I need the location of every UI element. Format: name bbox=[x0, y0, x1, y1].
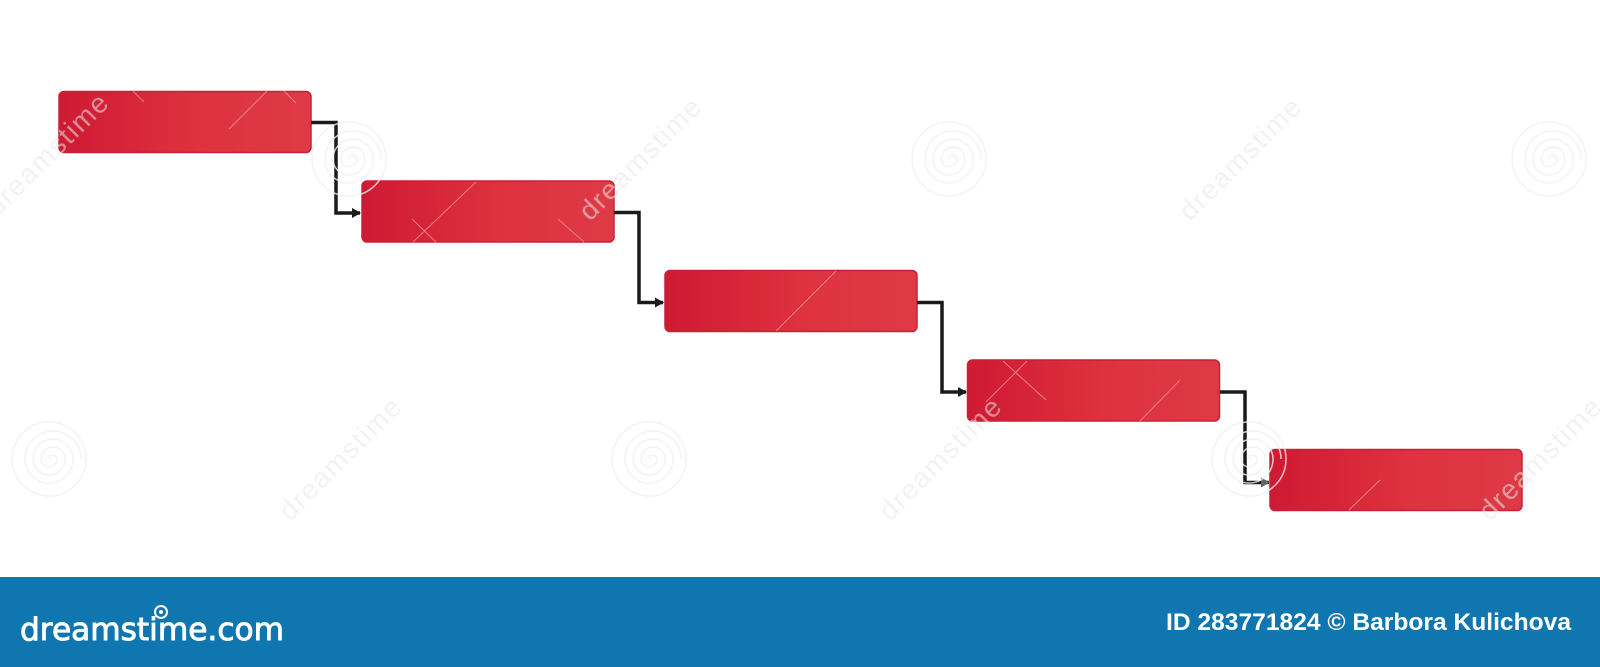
step box 5 bbox=[1270, 450, 1522, 510]
arrow 4 to 5 bbox=[1220, 392, 1269, 482]
footer logo: dreamstime.com bbox=[20, 612, 284, 648]
step box 1 bbox=[59, 91, 311, 152]
step box 2 bbox=[362, 181, 614, 242]
arrow 2 to 3 bbox=[614, 212, 663, 302]
watermark text bbox=[0, 86, 1600, 526]
footer bar bbox=[0, 577, 1600, 667]
arrow 3 to 4 bbox=[917, 302, 966, 392]
step box 4 bbox=[968, 360, 1220, 421]
arrow 1 to 2 bbox=[311, 122, 360, 213]
watermark text: dreamstime bbox=[572, 90, 708, 226]
watermark text: dreamstime bbox=[1172, 90, 1308, 226]
watermark spirals bbox=[12, 122, 1586, 496]
watermark text: dreamstime bbox=[272, 390, 408, 526]
step box 3 bbox=[665, 270, 917, 332]
footer credit: ID 283771824 © Barbora Kulichova bbox=[1166, 609, 1572, 636]
watermark text: dreamstime bbox=[872, 390, 1008, 526]
